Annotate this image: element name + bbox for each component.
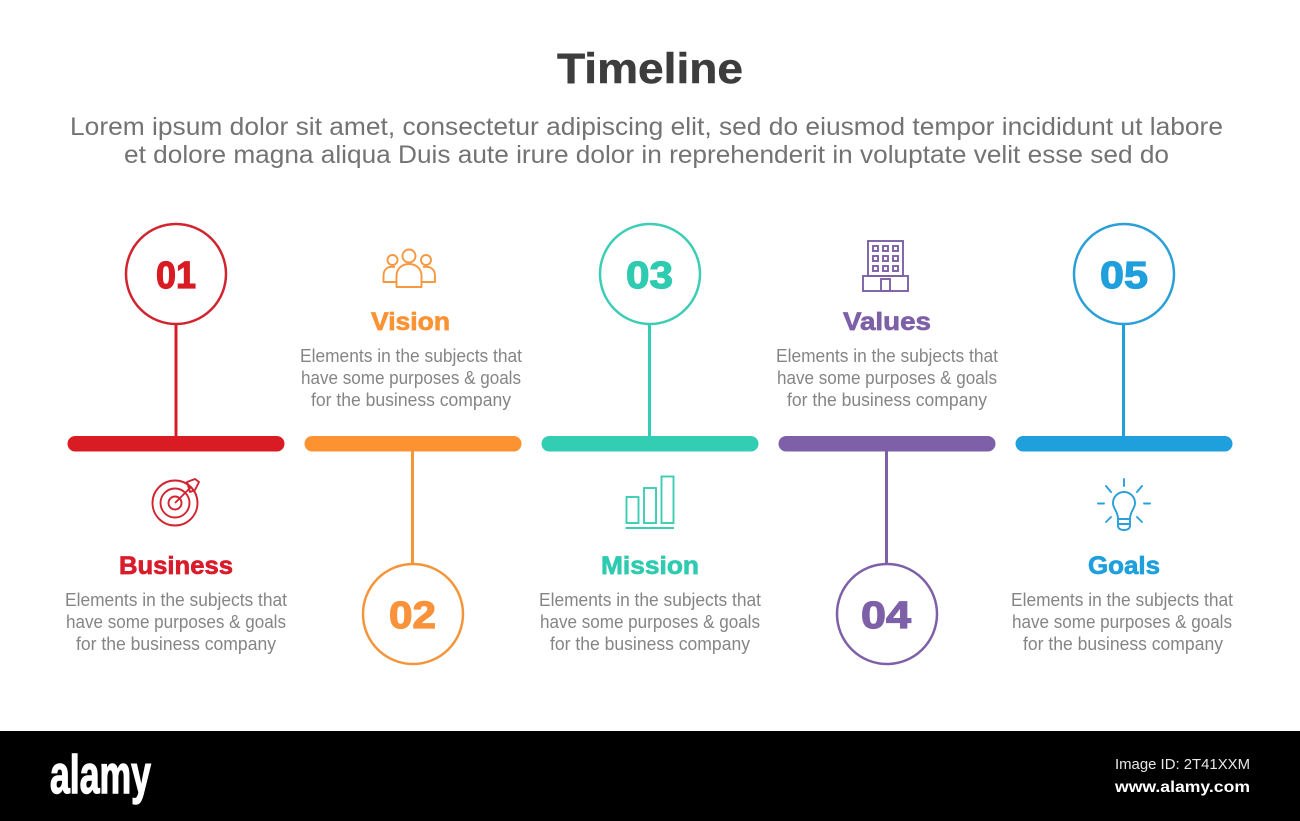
title: Timeline bbox=[557, 45, 743, 93]
step 2: Vision bbox=[300, 250, 522, 664]
step 1: Business bbox=[65, 224, 287, 654]
description 1 bbox=[65, 590, 287, 654]
number circle 04: 04 bbox=[861, 595, 911, 637]
timeline bar 3 bbox=[542, 436, 758, 452]
number circle 01: 01 bbox=[156, 255, 196, 297]
description 1: Elements in the subjects that bbox=[65, 590, 287, 610]
description 2: for the business company bbox=[311, 390, 511, 410]
description 3 bbox=[539, 590, 761, 654]
step 5: Goals bbox=[1011, 224, 1233, 654]
footer watermark band bbox=[0, 731, 1300, 821]
description 1: have some purposes & goals bbox=[66, 612, 286, 632]
description 4: for the business company bbox=[787, 390, 987, 410]
number circle 03 bbox=[600, 224, 700, 324]
heading Values: Values bbox=[843, 308, 931, 336]
icon: group of people bbox=[384, 250, 435, 287]
icon: office building bbox=[863, 241, 908, 291]
number circle 05 bbox=[1074, 224, 1174, 324]
connector 2 bbox=[411, 451, 414, 564]
number circle 03: 03 bbox=[626, 255, 673, 297]
description 4: have some purposes & goals bbox=[777, 368, 997, 388]
heading Vision: Vision bbox=[371, 308, 450, 336]
step 4: Values bbox=[776, 241, 998, 664]
timeline bar 4 bbox=[778, 436, 996, 452]
description 5: have some purposes & goals bbox=[1012, 612, 1232, 632]
description 4: Elements in the subjects that bbox=[776, 346, 998, 366]
number circle 05: 05 bbox=[1100, 255, 1148, 297]
number circle 04 bbox=[837, 564, 937, 664]
connector 4 bbox=[885, 451, 888, 564]
icon: target with arrow bbox=[152, 479, 199, 526]
step 3: Mission bbox=[539, 224, 761, 654]
timeline bar 5 bbox=[1016, 436, 1232, 452]
description 5: for the business company bbox=[1023, 634, 1223, 654]
description 5 bbox=[1011, 590, 1233, 654]
subtitle text: et dolore magna aliqua Duis aute irure dolor in reprehenderit in voluptate velit esse sed do bbox=[124, 141, 1169, 169]
heading Mission: Mission bbox=[601, 552, 699, 580]
number circle 02 bbox=[363, 564, 463, 664]
description 1: for the business company bbox=[76, 634, 276, 654]
description 2: Elements in the subjects that bbox=[300, 346, 522, 366]
description 4 bbox=[776, 346, 998, 410]
connector 3 bbox=[648, 324, 651, 437]
image id: Image ID: 2T41XXM bbox=[1115, 756, 1250, 773]
description 3: for the business company bbox=[550, 634, 750, 654]
subtitle text: Lorem ipsum dolor sit amet, consectetur adipiscing elit, sed do eiusmod tempor incididunt ut labore bbox=[70, 113, 1223, 141]
timeline bar 2 bbox=[304, 436, 522, 452]
connector 5 bbox=[1122, 324, 1125, 437]
heading Business: Business bbox=[119, 552, 233, 580]
website: www.alamy.com bbox=[1114, 779, 1250, 796]
description 3: have some purposes & goals bbox=[540, 612, 760, 632]
icon: light bulb bbox=[1098, 479, 1150, 530]
heading Goals: Goals bbox=[1088, 552, 1160, 580]
alamy logo text: alamy bbox=[50, 745, 151, 805]
description 5: Elements in the subjects that bbox=[1011, 590, 1233, 610]
icon: bar chart bbox=[626, 476, 674, 528]
description 2: have some purposes & goals bbox=[301, 368, 521, 388]
description 3: Elements in the subjects that bbox=[539, 590, 761, 610]
connector 1 bbox=[174, 324, 178, 437]
number circle 01 bbox=[126, 224, 226, 324]
timeline bar 1 bbox=[68, 436, 284, 452]
number circle 02: 02 bbox=[389, 595, 436, 637]
subtitle text bbox=[70, 113, 1223, 169]
description 2 bbox=[300, 346, 522, 410]
